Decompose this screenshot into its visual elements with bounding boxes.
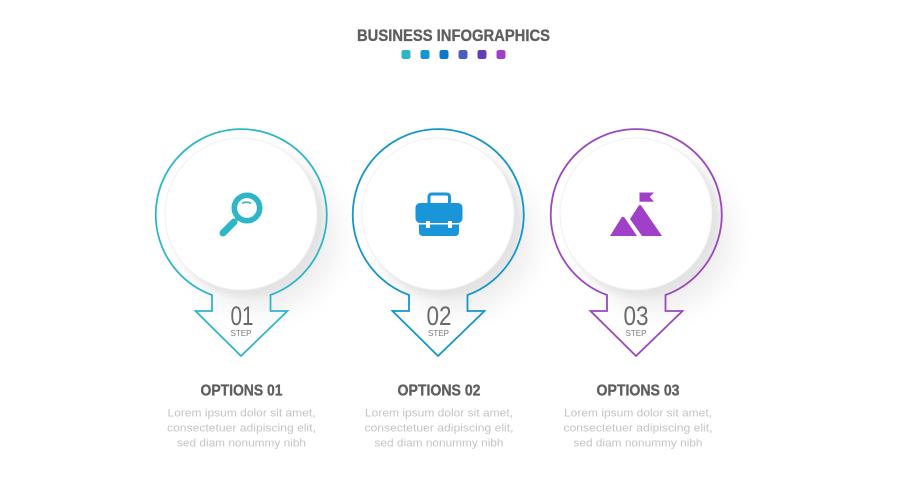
panel: step 03 xyxy=(551,129,733,449)
description 01: sed diam nonummy nibh xyxy=(177,438,306,450)
inner shadow 03 xyxy=(567,145,719,297)
description 03 xyxy=(564,408,712,450)
description 02: sed diam nonummy nibh xyxy=(374,438,504,450)
pin outline 02 xyxy=(353,129,524,356)
step label 01: STEP xyxy=(230,328,252,338)
description 02: consectetuer adipiscing elit, xyxy=(364,422,514,434)
description 01: Lorem ipsum dolor sit amet, xyxy=(168,408,316,420)
number 03: 03 xyxy=(624,301,648,331)
option heading 03: OPTIONS 03 xyxy=(596,382,680,400)
option heading 02: OPTIONS 02 xyxy=(398,382,481,400)
option heading 01: OPTIONS 01 xyxy=(200,382,283,400)
number 02: 02 xyxy=(426,301,452,331)
icon: magnifier xyxy=(223,195,260,233)
description 01: consectetuer adipiscing elit, xyxy=(167,422,316,434)
inner circle 02 xyxy=(362,138,514,290)
title: BUSINESS INFOGRAPHICS xyxy=(357,26,550,45)
soft shadow 02 xyxy=(383,160,535,312)
description 01 xyxy=(167,408,316,450)
inner circle 03 xyxy=(560,138,712,290)
icon: mountain with flag xyxy=(610,192,662,236)
number 01: 01 xyxy=(230,301,254,331)
panel: step 02 xyxy=(353,129,535,449)
inner circle 01 xyxy=(165,138,317,290)
panel: step 01 xyxy=(156,129,338,449)
soft shadow 01 xyxy=(186,160,338,312)
description 03: sed diam nonummy nibh xyxy=(574,438,702,450)
icon: briefcase xyxy=(416,194,462,236)
description 02: Lorem ipsum dolor sit amet, xyxy=(365,408,513,420)
step label 02: STEP xyxy=(428,328,449,338)
soft shadow 03 xyxy=(581,160,733,312)
pin outline 01 xyxy=(156,129,327,356)
pin outline 03 xyxy=(551,129,722,356)
inner shadow 02 xyxy=(369,145,521,297)
step label 03: STEP xyxy=(626,328,647,338)
inner shadow 01 xyxy=(172,145,324,297)
description 03: consectetuer adipiscing elit, xyxy=(564,422,712,434)
colored dots row xyxy=(402,50,506,59)
description 02 xyxy=(364,408,514,450)
description 03: Lorem ipsum dolor sit amet, xyxy=(564,408,712,420)
